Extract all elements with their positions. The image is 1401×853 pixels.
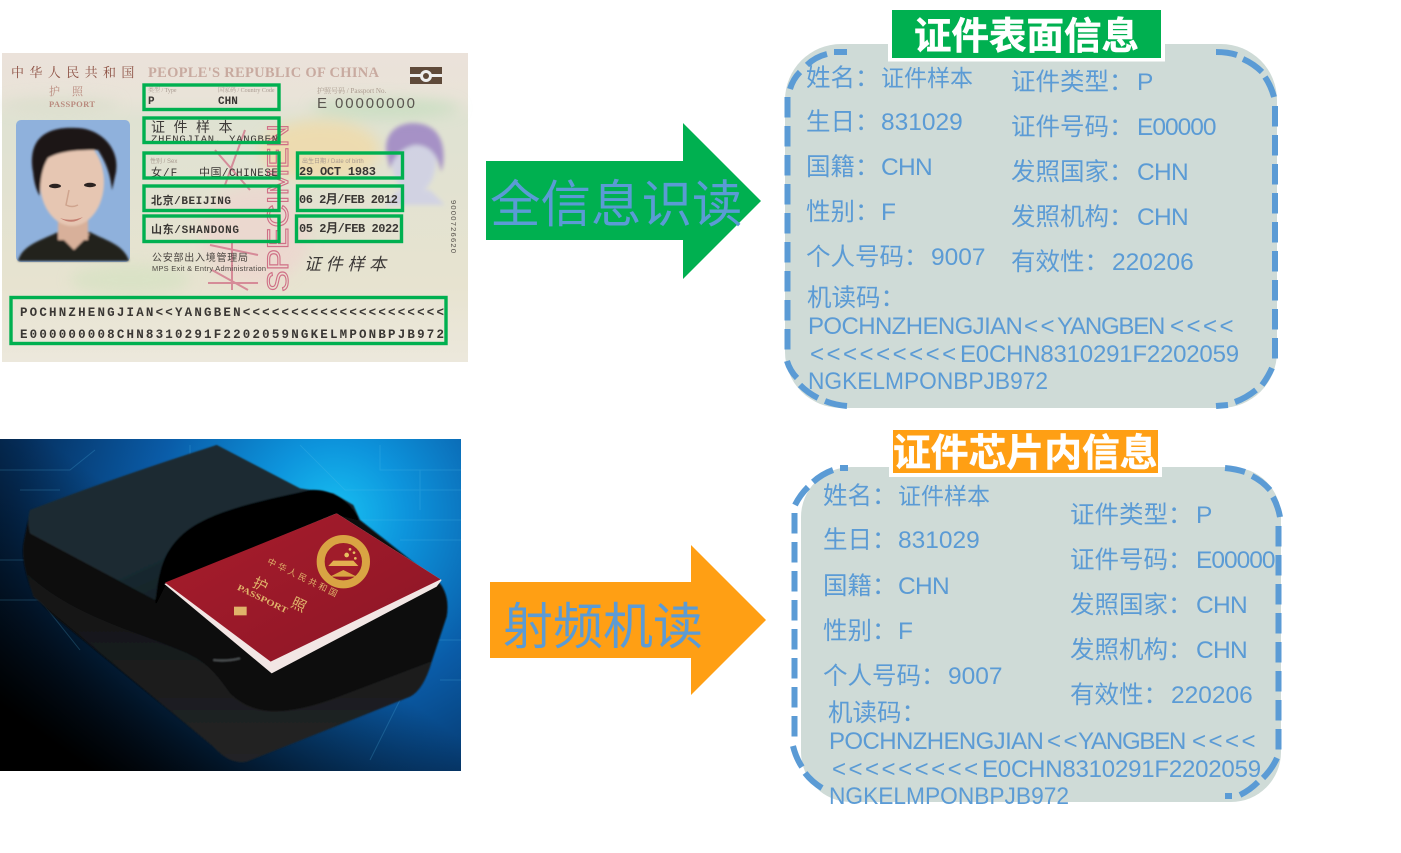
- passport header text: PASSPORT: [49, 99, 95, 109]
- surface machine readable code: <<<<: [1170, 313, 1236, 340]
- chip machine readable code: POCHNZHENGJIAN: [829, 728, 1043, 755]
- surface fields left column: 证件样本: [881, 65, 973, 91]
- chip fields right column: 证件号码：: [1070, 547, 1192, 574]
- chip fields right column: 发照机构：: [1070, 637, 1192, 664]
- passport field labels and values: ZHENGJIAN, YANGBEN: [151, 134, 278, 146]
- chip fields left column: [823, 482, 1003, 690]
- passport field labels and values: [148, 86, 458, 274]
- reader body: [23, 445, 447, 762]
- surface fields left column: F: [881, 199, 896, 226]
- surface fields left column: 9007: [931, 244, 986, 271]
- chip fields left column: CHN: [898, 573, 949, 600]
- chip fields left column: F: [898, 618, 913, 645]
- chip machine readable code: <<<<<<<<<: [832, 756, 981, 783]
- red specimen stamp: [208, 130, 258, 290]
- machine readable zone: [20, 306, 444, 342]
- machine readable zone: E000000008CHN8310291F2202059NGKELMPONBPJB972: [20, 328, 444, 342]
- chip fields left column: 证件样本: [898, 483, 990, 509]
- passport field labels and values: P: [148, 96, 155, 108]
- passport field labels and values: 出生日期 / Date of birth: [302, 157, 364, 165]
- passport field labels and values: MPS Exit & Entry Administration: [152, 264, 266, 273]
- surface fields right column: 证件号码：: [1011, 114, 1134, 141]
- passport field labels and values: 北京/BEIJING: [151, 193, 231, 208]
- dashed border: surface panel: [787, 52, 1275, 406]
- passport header text: 中华人民共和国: [11, 65, 140, 80]
- passport reader photo: 照: [288, 595, 309, 616]
- surface fields left column: CHN: [881, 154, 932, 181]
- passport header text: PEOPLE'S REPUBLIC OF CHINA: [148, 65, 380, 81]
- green recognition boxes: [11, 85, 446, 344]
- passport field labels and values: 证件样本: [304, 255, 388, 274]
- chip machine readable code: 机读码：: [828, 699, 926, 727]
- surface machine readable code: 机读码：: [807, 284, 905, 312]
- surface fields right column: P: [1137, 69, 1153, 96]
- surface machine readable code: E0CHN8310291F2202059: [960, 341, 1239, 368]
- heading: surface information: [888, 6, 1165, 62]
- chip fields left column: 个人号码：: [823, 663, 946, 690]
- chip machine readable code: NGKELMPONBPJB972: [829, 783, 1069, 810]
- surface fields right column: CHN: [1137, 159, 1188, 186]
- chip fields left column: 国籍：: [823, 573, 896, 600]
- machine readable zone: POCHNZHENGJIAN<<YANGBEN<<<<<<<<<<<<<<<<<<<<<: [20, 306, 444, 320]
- e-passport chip symbol: [410, 67, 442, 84]
- surface fields right column: 证件类型：: [1011, 69, 1134, 96]
- surface fields left column: [806, 64, 986, 271]
- surface machine readable code: [807, 284, 1239, 395]
- surface fields right column: [1011, 68, 1216, 276]
- chip machine readable code: <<: [1047, 728, 1080, 755]
- panel: chip information: [793, 426, 1281, 810]
- chip fields left column: 性别：: [823, 618, 896, 645]
- passport field labels and values: 证件样本: [151, 119, 241, 135]
- chip fields right column: [1070, 501, 1275, 709]
- ghost portrait: [385, 123, 445, 205]
- surface fields left column: 生日：: [806, 109, 880, 136]
- passport reader photo: [0, 439, 461, 771]
- chip fields left column: 9007: [948, 663, 1003, 690]
- passport header text: 护照: [49, 84, 95, 98]
- surface fields left column: 性别：: [806, 199, 880, 226]
- surface fields right column: 发照机构：: [1011, 204, 1134, 231]
- heading: chip information: 证件芯片内信息: [893, 433, 1158, 475]
- passport field labels and values: 05 2月/FEB 2022: [299, 221, 399, 236]
- reader lid: [28, 445, 360, 600]
- arrow: RF read: [490, 545, 766, 695]
- chip fields right column: 220206: [1171, 682, 1253, 709]
- passport data page image: [0, 53, 468, 362]
- surface fields left column: 831029: [881, 109, 963, 136]
- holder portrait photo: [16, 120, 130, 262]
- passport reader photo: PASSPORT: [236, 582, 290, 615]
- dashed border: chip panel: [793, 468, 1280, 796]
- passport emblem: [321, 539, 366, 584]
- circuit pattern: [0, 445, 461, 760]
- passport header text: 护照号码 / Passport No.: [317, 86, 386, 95]
- surface machine readable code: POCHNZHENGJIAN: [808, 313, 1022, 340]
- passport field labels and values: 9000726620: [449, 200, 458, 253]
- surface machine readable code: <<<<<<<<<: [810, 341, 959, 368]
- passport header text: E 00000000: [317, 95, 415, 112]
- arrow: full information read: [486, 123, 761, 279]
- chip machine readable code: E0CHN8310291F2202059: [982, 756, 1261, 783]
- passport header text: [11, 65, 415, 112]
- chip fields right column: CHN: [1196, 637, 1247, 664]
- arrow: full information read: 全信息识读: [490, 176, 742, 233]
- passport data page image: SPECIMEN: [262, 124, 295, 292]
- reader lower shell: [27, 573, 432, 762]
- chip machine readable code: [828, 699, 1261, 810]
- chip fields right column: 发照国家：: [1070, 592, 1192, 619]
- heading: surface information: 证件表面信息: [914, 15, 1139, 57]
- surface machine readable code: NGKELMPONBPJB972: [808, 368, 1048, 395]
- chip fields left column: 姓名：: [823, 483, 896, 510]
- surface machine readable code: <<: [1024, 313, 1057, 340]
- surface fields left column: 国籍：: [806, 154, 880, 181]
- chip fields right column: CHN: [1196, 592, 1247, 619]
- surface fields right column: 有效性：: [1011, 249, 1109, 276]
- surface fields left column: 姓名：: [806, 65, 880, 92]
- chip fields right column: P: [1196, 502, 1212, 529]
- surface fields right column: 发照国家：: [1011, 159, 1134, 186]
- passport reader photo: 护: [250, 574, 271, 596]
- surface fields right column: E00000: [1137, 114, 1216, 141]
- passport field labels and values: 类型 / Type: [148, 86, 177, 94]
- chip fields right column: E00000: [1196, 547, 1275, 574]
- chip fields right column: 证件类型：: [1070, 502, 1192, 529]
- passport field labels and values: CHN: [218, 96, 238, 108]
- surface fields left column: 个人号码：: [806, 244, 928, 271]
- surface fields right column: CHN: [1137, 204, 1188, 231]
- surface machine readable code: YANGBEN: [1057, 313, 1164, 340]
- passport field labels and values: 06 2月/FEB 2012: [299, 192, 398, 207]
- chip fields right column: 有效性：: [1070, 682, 1168, 709]
- passport field labels and values: 性别 / Sex: [150, 157, 177, 165]
- passport field labels and values: 山东/SHANDONG: [151, 222, 239, 237]
- chip fields left column: 生日：: [823, 527, 896, 554]
- chip machine readable code: <<<<: [1192, 728, 1258, 755]
- passport field labels and values: 女/F: [151, 165, 178, 180]
- panel: document surface information: [785, 6, 1277, 408]
- passport field labels and values: 公安部出入境管理局: [152, 251, 248, 264]
- passport reader photo: 中华人民共和国: [266, 555, 340, 599]
- passport field labels and values: 国家码 / Country Code: [218, 86, 275, 94]
- surface fields right column: 220206: [1112, 249, 1194, 276]
- chip fields left column: 831029: [898, 527, 980, 554]
- passport field labels and values: 29 OCT 1983: [299, 165, 376, 179]
- passport booklet: [164, 513, 442, 673]
- chip machine readable code: YANGBEN: [1078, 728, 1185, 755]
- passport field labels and values: 中国/CHINESE: [199, 166, 278, 180]
- arrow: RF read: 射频机读: [503, 599, 703, 655]
